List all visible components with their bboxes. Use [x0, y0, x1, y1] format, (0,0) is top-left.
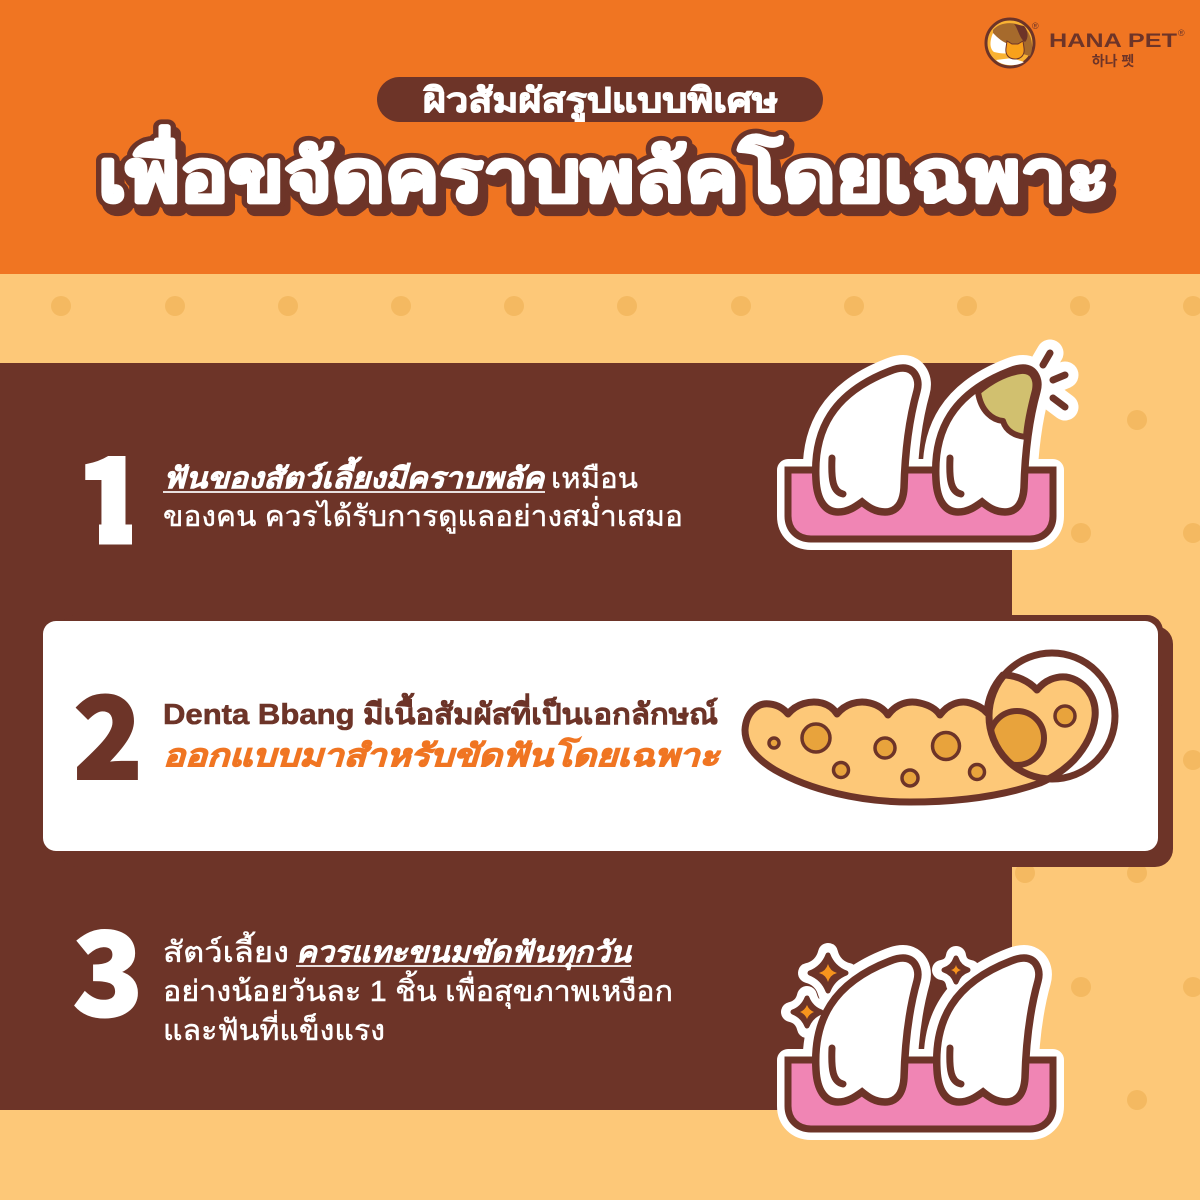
step 2 text: Denta Bbang มีเนื้อสัมผัสที่เป็นเอกลักษณ์	[163, 692, 718, 731]
logo: Hana Pet: HANA PET	[1049, 31, 1178, 52]
magnifier circle	[989, 653, 1115, 779]
subtitle pill	[377, 77, 823, 122]
main title: เพื่อขจัดคราบพลัคโดยเฉพาะ	[98, 125, 1110, 217]
step 3 text: สัตว์เลี้ยง	[163, 931, 289, 969]
step 2 card	[43, 615, 1173, 867]
step 2 text: ออกแบบมาสำหรับขัดฟันโดยเฉพาะ	[163, 737, 722, 773]
main title: เพื่อขจัดคราบพลัคโดยเฉพาะ	[98, 125, 1110, 217]
logo: Hana Pet: ®	[1032, 21, 1039, 31]
icon: textured dental chew	[745, 653, 1115, 802]
main title: เพื่อขจัดคราบพลัคโดยเฉพาะ	[103, 132, 1115, 224]
brown content panel	[0, 363, 1012, 1110]
step 3 text: ควรแทะขนมขัดฟันทุกวัน	[296, 937, 632, 971]
step 3 text: อย่างน้อยวันละ 1 ชิ้น เพื่อสุขภาพเหงือก	[163, 970, 673, 1009]
step 3 text	[163, 931, 673, 1047]
sparkle halos	[791, 953, 970, 1028]
step 1 text: ของคน ควรได้รับการดูแลอย่างสม่ำเสมอ	[163, 496, 683, 534]
plaque	[978, 371, 1035, 437]
number 3: 3	[73, 882, 143, 1050]
icon: teeth with plaque	[788, 353, 1065, 539]
card shadow	[60, 615, 1173, 867]
chew holes	[769, 706, 1075, 786]
icon: clean sparkling teeth	[788, 953, 1053, 1129]
step 3	[73, 882, 673, 1050]
number 2: 2	[73, 647, 143, 812]
logo: Hana Pet: ®	[1178, 28, 1185, 38]
logo: Hana Pet	[986, 19, 1185, 69]
step 1 text: ฟันของสัตว์เลี้ยงมีคราบพลัค	[163, 456, 546, 495]
card	[43, 621, 1158, 851]
step 1 text	[163, 456, 683, 534]
step 2 text	[163, 692, 722, 773]
step 1	[75, 406, 683, 577]
subtitle pill: ผิวสัมผัสรูปแบบพิเศษ	[423, 82, 778, 122]
sparkles	[793, 955, 968, 1026]
dot pattern	[51, 296, 1200, 1110]
step 3 text: และฟันที่แข็งแรง	[163, 1010, 385, 1047]
logo: Hana Pet: 하나 펫	[1092, 53, 1134, 69]
header band	[0, 0, 1200, 274]
number 1: 1	[75, 406, 147, 577]
step 1 text: เหมือน	[551, 463, 638, 495]
large chew hole in magnifier	[990, 711, 1044, 765]
